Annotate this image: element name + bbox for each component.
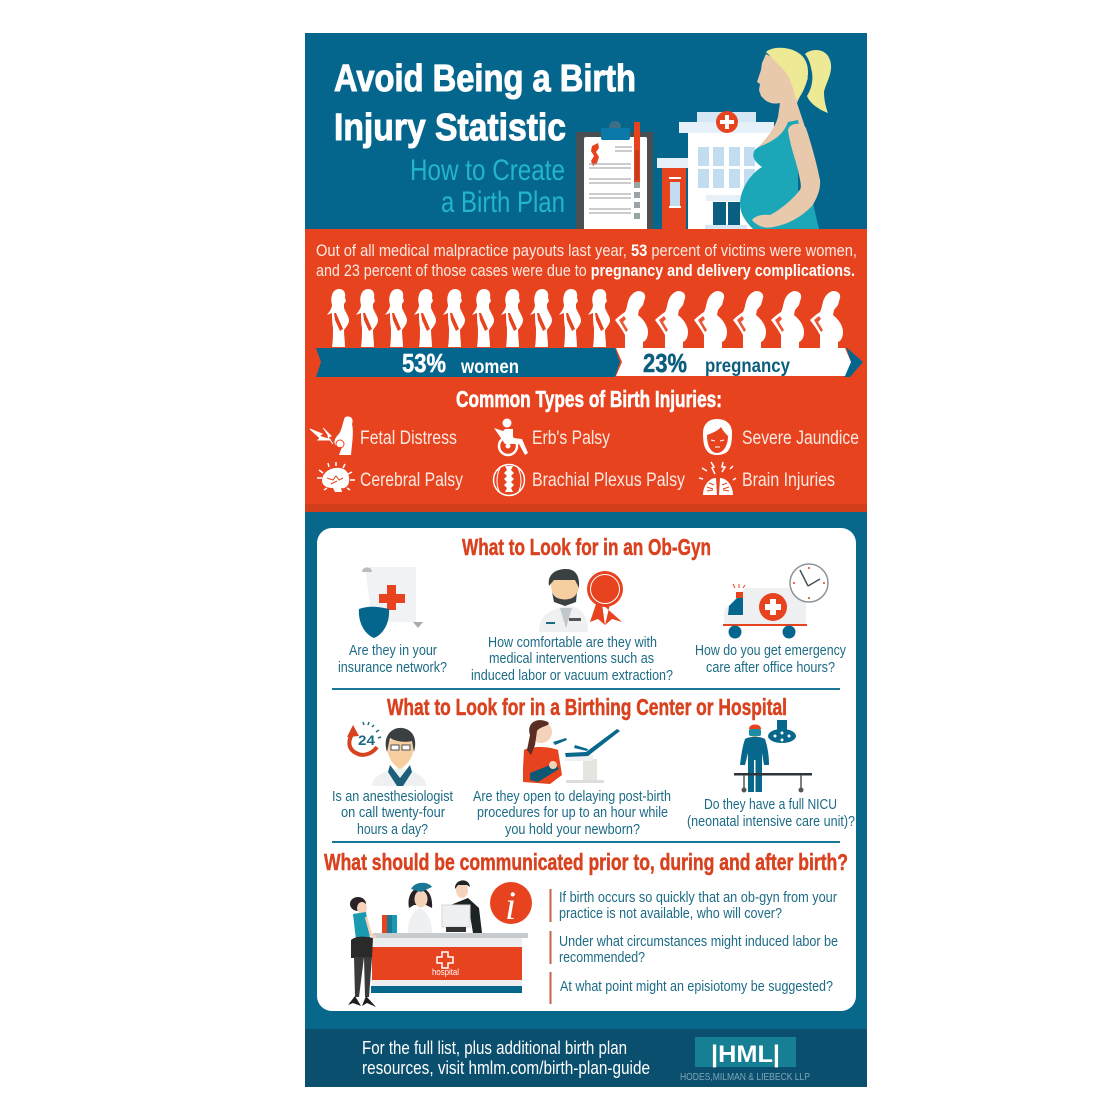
panel: statistics band: [305, 229, 867, 512]
subtitle: [410, 154, 565, 219]
item: cerebral palsy: Cerebral Palsy: [360, 470, 463, 491]
heading: common types: Common Types of Birth Injuries:: [456, 386, 722, 412]
logo: HML: [680, 1037, 810, 1083]
text: interventions question: How comfortable are they with: [488, 634, 657, 651]
text: emergency question: care after office hours?: [706, 659, 835, 676]
ribbon: 53% women: 53%: [402, 348, 446, 378]
text: call to action: [362, 1038, 650, 1078]
text: post-birth question: Are they open to delaying post-birth: [473, 788, 671, 805]
illustration: hospital reception desk: i: [505, 883, 516, 928]
text block: malpractice statistic: [316, 241, 857, 280]
heading: communication: What should be communicated prior to, during and after birth?: [324, 849, 848, 875]
icon: ambulance and clock: [723, 564, 828, 638]
item: fetal distress: [310, 416, 457, 455]
text block: malpractice statistic: Out of all medical malpractice payouts last year, 53 percent of victims were women,: [316, 241, 857, 260]
title: Injury Statistic: [334, 107, 566, 149]
dividers and questions: communication list: If birth occurs so quickly that an ob-gyn from your: [559, 889, 837, 906]
item: brain injuries: [699, 462, 835, 495]
heading: birthing center: What to Look for in a Birthing Center or Hospital: [387, 694, 787, 720]
item: severe jaundice: [703, 419, 859, 455]
dividers and questions: communication list: [550, 889, 838, 1004]
panel: footer: [305, 1029, 867, 1087]
text: post-birth question: you hold your newborn?: [505, 821, 640, 838]
text: insurance question: [338, 642, 447, 676]
icon: mother with newborn and bed: [523, 720, 620, 784]
panel: header: [305, 33, 867, 232]
text: interventions question: medical interventions such as: [489, 650, 654, 667]
ribbon: 53% women: women: [460, 357, 519, 378]
text: emergency question: [695, 642, 846, 676]
title: Avoid Being a Birth: [334, 58, 636, 100]
text: insurance question: Are they in your: [349, 642, 437, 659]
item: brachial plexus palsy: [494, 464, 685, 496]
text: NICU question: Do they have a full NICU: [704, 796, 837, 813]
icon: NICU doctor and operating table: [734, 720, 812, 792]
icon: doctor with ribbon: [539, 569, 623, 632]
text: anesthesiologist question: hours a day?: [357, 821, 428, 838]
ribbon: 23% pregnancy: pregnancy: [705, 356, 790, 377]
icon: pregnant woman: [740, 48, 831, 229]
text: interventions question: [471, 634, 673, 684]
text: post-birth question: procedures for up to an hour while: [477, 804, 668, 821]
item: brachial plexus palsy: Brachial Plexus Palsy: [532, 470, 685, 491]
text: NICU question: [687, 796, 855, 830]
illustration: hospital reception desk: hospital: [432, 967, 459, 977]
dividers and questions: communication list: practice is not available, who will cover?: [559, 905, 782, 922]
illustration: hospital reception desk: [348, 880, 532, 1007]
icon: insurance scroll and shield: [359, 567, 423, 638]
text: post-birth question: [473, 788, 671, 838]
item: Erb's palsy: [494, 418, 610, 455]
text: call to action: resources, visit hmlm.com/birth-plan-guide: [362, 1058, 650, 1078]
icon: clipboard: [576, 121, 653, 232]
logo: HML: HODES,MILMAN & LIEBECK LLP: [680, 1072, 810, 1083]
icon: 24 hour anesthesiologist: [347, 722, 426, 786]
text: NICU question: (neonatal intensive care unit)?: [687, 813, 855, 830]
item: fetal distress: Fetal Distress: [360, 428, 457, 449]
text: insurance question: insurance network?: [338, 659, 447, 676]
subtitle: a Birth Plan: [441, 186, 565, 219]
text: emergency question: How do you get emergency: [695, 642, 846, 659]
text: call to action: For the full list, plus additional birth plan: [362, 1038, 627, 1058]
icon: 24 hour anesthesiologist: 24: [358, 732, 375, 748]
icon: hospital: [657, 111, 774, 230]
ribbon: 23% pregnancy: [616, 347, 863, 378]
heading: ob-gyn: What to Look for in an Ob-Gyn: [462, 534, 711, 560]
logo: HML: |HML|: [711, 1041, 780, 1068]
text: anesthesiologist question: [332, 788, 454, 838]
item: Erb's palsy: Erb's Palsy: [532, 428, 610, 449]
ribbon: 23% pregnancy: 23%: [643, 348, 687, 378]
text: anesthesiologist question: on call twenty-four: [341, 804, 445, 821]
dividers and questions: communication list: Under what circumstances might induced labor be: [559, 933, 838, 950]
panel: guidance section background: [305, 512, 867, 1029]
text: interventions question: induced labor or vacuum extraction?: [471, 667, 673, 684]
text: anesthesiologist question: Is an anesthesiologist: [332, 788, 454, 805]
item: brain injuries: Brain Injuries: [742, 470, 835, 491]
item: cerebral palsy: [317, 462, 463, 492]
title: [334, 58, 636, 149]
ribbon: 53% women: [316, 348, 620, 378]
dividers and questions: communication list: recommended?: [559, 949, 645, 966]
subtitle: How to Create: [410, 154, 565, 187]
panel: white card: [317, 528, 856, 1011]
dividers and questions: communication list: At what point might an episiotomy be suggested?: [560, 978, 833, 995]
item: severe jaundice: Severe Jaundice: [742, 428, 859, 449]
chart: pictogram of women: [327, 289, 843, 348]
text block: malpractice statistic: and 23 percent of those cases were due to pregnancy and delivery complications.: [316, 261, 855, 280]
